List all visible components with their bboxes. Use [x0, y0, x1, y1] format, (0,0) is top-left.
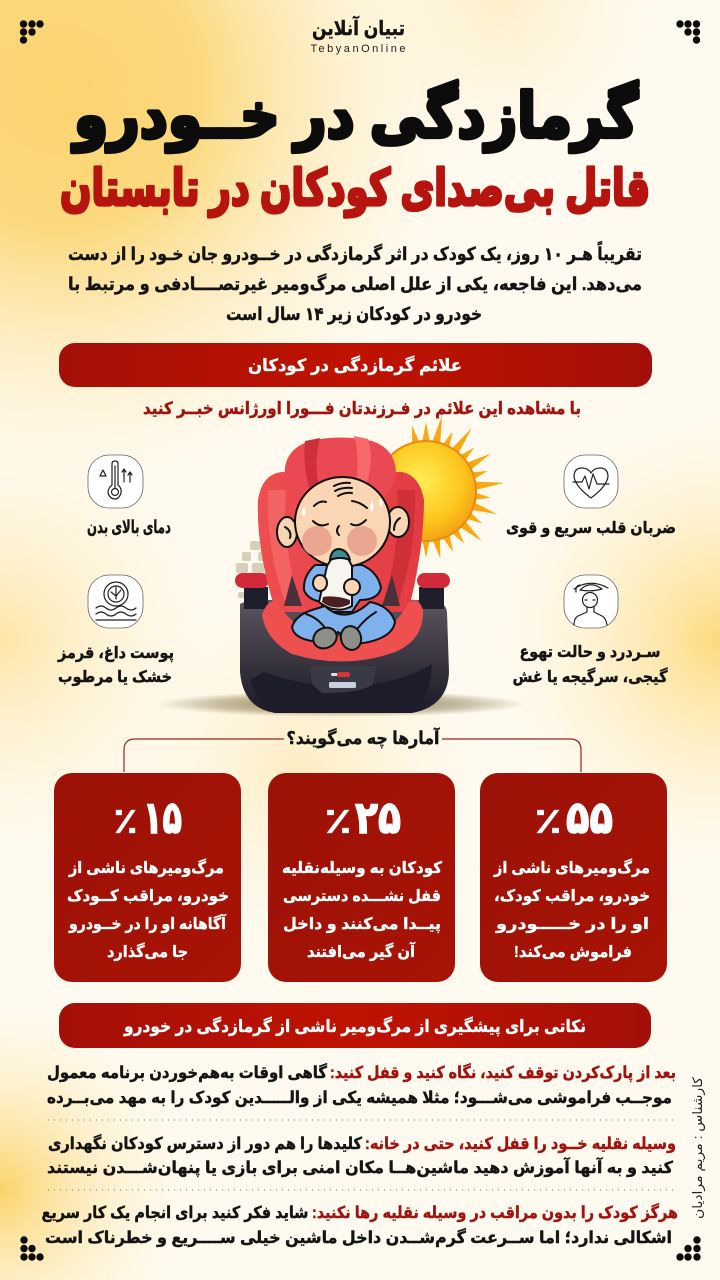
corner ornament: bottom left: [20, 1236, 44, 1261]
stat: 25%: ٪: [324, 800, 352, 841]
label: skin: خشک یا مرطوب: [58, 669, 172, 686]
warning line: با مشاهده این علائم در فـرزندتان فـــورا اورژانس خبــر کنید: [143, 399, 581, 419]
banner: symptoms heading: [59, 343, 652, 387]
icon: dizziness: [564, 575, 618, 628]
baby: feet: [310, 624, 364, 652]
baby: head: [295, 477, 390, 567]
card text: [67, 858, 229, 961]
connector lines: [124, 739, 581, 772]
tip 3: شاید فکر کنید برای انجام یک کار سریع: [42, 1204, 308, 1223]
intro paragraph: تقریباً هـر ۱۰ روز، یک کودک در اثر گرمازدگی در خــودرو جان خـود را از دست: [68, 241, 642, 265]
baby: hands: [313, 575, 360, 595]
illustration: watermark: [236, 541, 268, 598]
card text: قفل نشـــده دسترسی: [283, 888, 441, 905]
icon: thermometer: [88, 455, 143, 508]
tip 1: موجــب فراموشی می‌شـــود؛ مثلا همیشه یکی از والـــــدین کودک را به مهد می‌بــرده: [47, 1089, 672, 1108]
stat: 55%: ٪: [534, 800, 562, 841]
stat: 55%: ۵۵: [566, 792, 613, 843]
card text: فراموش می‌کند!: [514, 944, 632, 961]
intro paragraph: خودرو در کودکان زیر ۱۴ سال است: [226, 304, 482, 325]
stat: 25%: [324, 792, 401, 843]
card: 55 percent: [480, 773, 667, 982]
tip 1: بعد از پارک‌کردن توقف کنید، نگاه کنید و قفل کنید:: [330, 1062, 676, 1083]
banner: prevention heading: نکاتی برای پیشگیری از مرگ‌ومیر ناشی از گرمازدگی در خودرو: [123, 1016, 586, 1037]
vertical credit: کارشناس : مریم مرادیان: [690, 1076, 706, 1219]
card text: پیــدا می‌کنند و داخل: [283, 916, 441, 934]
card text: [282, 860, 443, 961]
label: skin: پوست داغ، قرمز: [57, 645, 174, 663]
dotted dividers: [48, 1120, 676, 1190]
stat: 15%: ۱۵: [143, 792, 182, 843]
tip 2: [47, 1133, 676, 1178]
card text: کودکان به وسیله‌نقلیه: [282, 860, 443, 877]
tip 3: [42, 1202, 678, 1248]
label: skin: [57, 645, 174, 686]
label: headache: گیجی، سرگیجه یا غش: [512, 667, 668, 686]
tip 2: کنید و به آنها آموزش دهید ماشین‌هــا مکان امنی برای بازی یا پنهان‌شـــدن نیستند: [47, 1156, 673, 1178]
card text: خودرو، مراقب کــودک: [67, 888, 229, 905]
stat: 15%: [113, 792, 182, 843]
card text: [493, 858, 650, 961]
illustration: car seat: [235, 436, 450, 713]
stat: 25%: ۲۵: [355, 792, 401, 843]
tip 3: هرگز کودک را بدون مراقب در وسیله نقلیه رها نکنید:: [312, 1202, 678, 1223]
intro paragraph: [68, 241, 642, 325]
illustration: baby: [277, 477, 409, 652]
card text: او را در خـــــودرو: [495, 916, 649, 933]
label: heart rate: ضربان قلب سریع و قوی: [506, 520, 676, 537]
logo: [310, 15, 406, 55]
intro paragraph: می‌دهد. این فاجعه، یکی از علل اصلی مرگ‌ومیر غیرتصــــادفی و مرتبط با: [68, 273, 642, 295]
card: 25 percent: [268, 773, 455, 982]
label: headache: سـردرد و حالت تهوع: [520, 644, 660, 661]
tip 1: [47, 1062, 676, 1108]
card: 15 percent: [54, 773, 241, 982]
banner: symptoms heading: علائم گرمازدگی در کودکان: [248, 355, 462, 376]
baby: ears: [277, 507, 409, 547]
baby: bottle: [319, 549, 352, 610]
icon: heartbeat: [564, 455, 618, 508]
icon: hot skin: [88, 575, 143, 628]
baby: face: [302, 483, 382, 535]
card text: خودرو، مراقب کودک،: [494, 888, 650, 905]
card text: آگاهانه او را در خــودرو: [68, 913, 226, 933]
banner: prevention heading: [59, 1003, 651, 1048]
logo: TebyanOnline: [310, 43, 406, 55]
tip 2: وسیله نقلیه خــود را قفل کنید، حتی در خانه:: [365, 1135, 676, 1154]
title: گرمازدگی در خــودرو: [71, 80, 639, 152]
card text: مرگ‌ومیرهای ناشی از: [68, 858, 224, 877]
baby: cheeks: [302, 526, 377, 556]
label: body temperature: دمای بالای بدن: [87, 517, 171, 537]
baby: blue suit: [292, 565, 395, 644]
logo: تبیان آنلاین: [312, 15, 405, 40]
stat: 55%: [534, 792, 613, 843]
illustration: sun: [376, 415, 505, 560]
illustration: ground shadow: [157, 691, 527, 717]
card text: جا می‌گذارد: [107, 942, 188, 961]
corner ornament: top right: [676, 20, 700, 44]
card text: مرگ‌ومیرهای ناشی از: [493, 858, 650, 877]
tip 3: اشکالی ندارد؛ اما ســرعت گرم‌شــدن داخل ماشین خیلی ســــریع و خطرناک است: [45, 1227, 672, 1248]
tip 1: گاهی اوقات به‌هم‌خوردن برنامه معمول: [47, 1062, 327, 1083]
corner ornament: bottom right: [676, 1236, 701, 1261]
stats heading: آمارها چه می‌گویند؟: [286, 726, 440, 749]
tip 2: کلیدها را هم دور از دسترس کودکان نگهداری: [48, 1133, 362, 1154]
label: headache: [512, 644, 668, 686]
corner ornament: top left: [20, 20, 44, 44]
card text: آن گیر می‌افتند: [307, 941, 415, 961]
stat: 15%: ٪: [113, 800, 138, 841]
